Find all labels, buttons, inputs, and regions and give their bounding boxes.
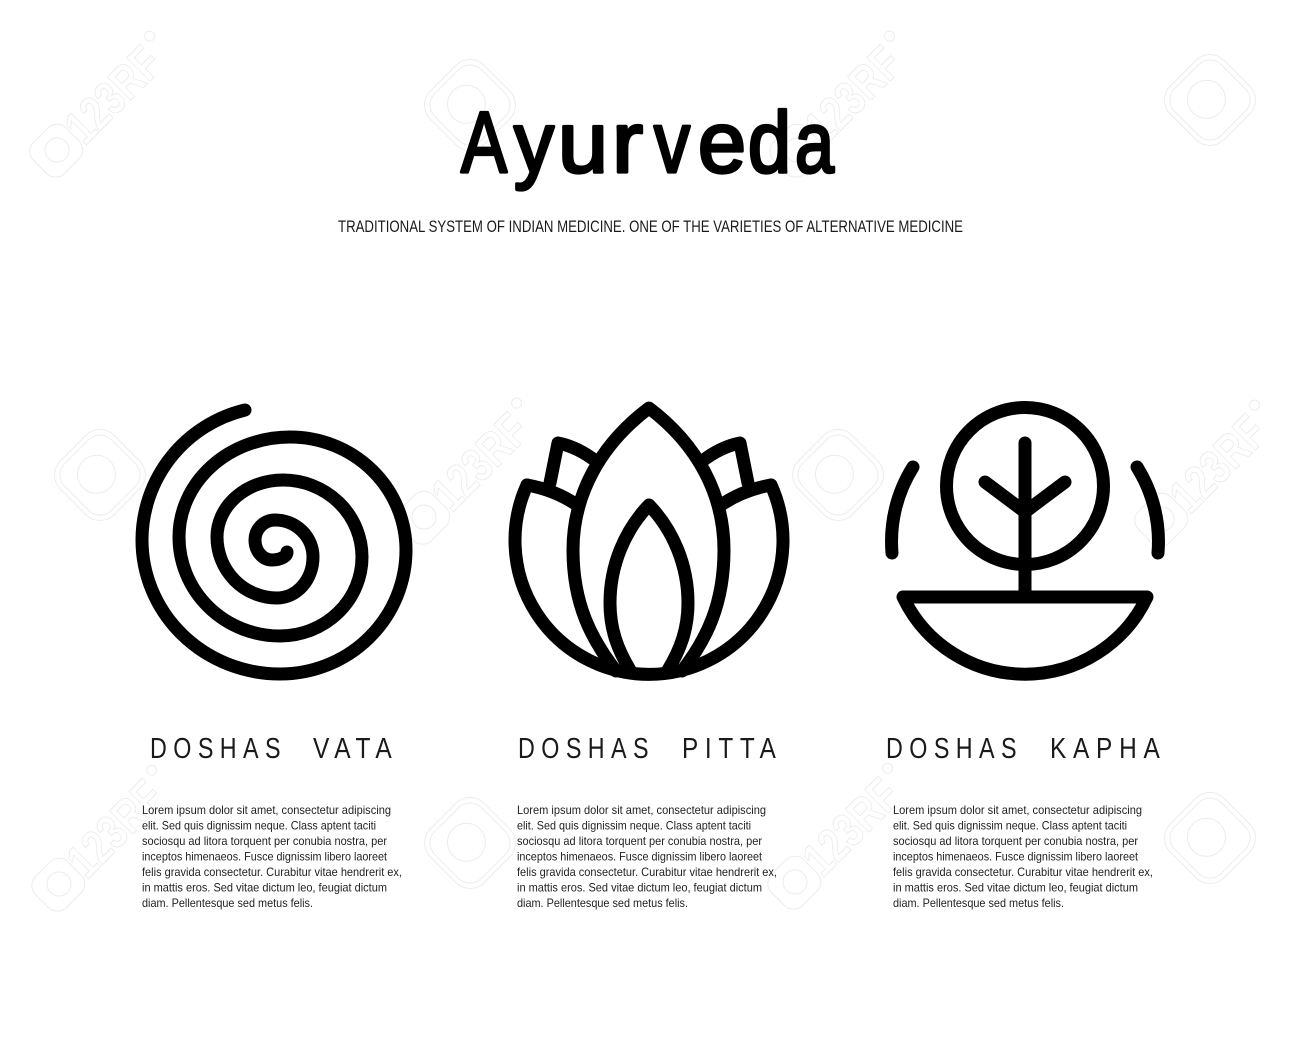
subtitle: TRADITIONAL SYSTEM OF INDIAN MEDICINE. ONE OF THE VARIETIES OF ALTERNATIVE MEDICINE bbox=[338, 217, 963, 236]
watermarks: 123RF bbox=[1160, 406, 1277, 523]
heading: doshas kapha: KAPHA bbox=[1050, 733, 1166, 765]
text block: vata description: in mattis eros. Sed vitae dictum leo, feugiat dictum bbox=[142, 880, 387, 894]
panel: doshas kapha bbox=[886, 408, 1166, 910]
heading: doshas vata: DOSHAS bbox=[150, 733, 287, 765]
icon: lotus bbox=[515, 408, 783, 674]
title: e bbox=[698, 95, 746, 191]
heading: doshas pitta: DOSHAS bbox=[518, 733, 655, 765]
panel: doshas pitta bbox=[515, 408, 783, 910]
title: a bbox=[795, 95, 834, 191]
title: r bbox=[612, 95, 643, 191]
text block: kapha description: sociosqu ad litora torquent per conubia nostra, per bbox=[893, 834, 1138, 848]
title: v bbox=[654, 95, 690, 191]
text block: pitta description: in mattis eros. Sed vitae dictum leo, feugiat dictum bbox=[517, 880, 762, 894]
title: y bbox=[514, 95, 554, 191]
text block: pitta description: Lorem ipsum dolor sit amet, consectetur adipiscing bbox=[517, 803, 766, 817]
text block: kapha description: inceptos himenaeos. Fusce dignissim libero laoreet bbox=[893, 850, 1139, 864]
text block: kapha description: Lorem ipsum dolor sit amet, consectetur adipiscing bbox=[893, 803, 1142, 817]
heading: doshas vata: VATA bbox=[313, 733, 398, 765]
text block: kapha description: in mattis eros. Sed vitae dictum leo, feugiat dictum bbox=[893, 880, 1138, 894]
text block: vata description bbox=[142, 803, 402, 910]
text block: pitta description: diam. Pellentesque sed metus felis. bbox=[517, 896, 688, 910]
heading: doshas pitta: PITTA bbox=[682, 733, 782, 765]
panel: doshas vata bbox=[142, 410, 406, 910]
watermarks: 123RF bbox=[55, 37, 172, 154]
watermarks: 123RF bbox=[57, 771, 174, 888]
text block: pitta description: inceptos himenaeos. Fusce dignissim libero laoreet bbox=[517, 850, 763, 864]
text block: kapha description bbox=[893, 803, 1153, 910]
text block: vata description: diam. Pellentesque sed metus felis. bbox=[142, 896, 313, 910]
text block: pitta description: felis gravida consectetur. Curabitur vitae hendrerit ex, bbox=[517, 865, 777, 879]
text block: kapha description: elit. Sed quis dignissim neque. Class aptent taciti bbox=[893, 818, 1127, 832]
title: u bbox=[558, 95, 608, 191]
title: A bbox=[461, 95, 508, 191]
heading: doshas kapha: DOSHAS bbox=[886, 733, 1023, 765]
text block: vata description: Lorem ipsum dolor sit amet, consectetur adipiscing bbox=[142, 803, 391, 817]
title: d bbox=[748, 95, 791, 191]
text block: pitta description: elit. Sed quis dignissim neque. Class aptent taciti bbox=[517, 818, 751, 832]
heading: doshas pitta bbox=[518, 733, 782, 765]
text block: pitta description: sociosqu ad litora torquent per conubia nostra, per bbox=[517, 834, 762, 848]
text block: vata description: sociosqu ad litora torquent per conubia nostra, per bbox=[142, 834, 387, 848]
text block: vata description: felis gravida consectetur. Curabitur vitae hendrerit ex, bbox=[142, 865, 402, 879]
heading: doshas vata bbox=[150, 733, 398, 765]
text block: pitta description bbox=[517, 803, 777, 910]
text block: kapha description: felis gravida consectetur. Curabitur vitae hendrerit ex, bbox=[893, 865, 1153, 879]
text block: kapha description: diam. Pellentesque sed metus felis. bbox=[893, 896, 1064, 910]
watermarks: 123RF bbox=[793, 769, 910, 886]
icon: spiral bbox=[142, 410, 406, 674]
text block: vata description: elit. Sed quis dignissim neque. Class aptent taciti bbox=[142, 818, 376, 832]
watermarks: 123RF bbox=[422, 404, 539, 521]
text block: vata description: inceptos himenaeos. Fusce dignissim libero laoreet bbox=[142, 850, 388, 864]
watermarks: 123RF bbox=[795, 37, 912, 154]
heading: doshas kapha bbox=[886, 733, 1166, 765]
icon: tree in bowl bbox=[892, 408, 1158, 674]
